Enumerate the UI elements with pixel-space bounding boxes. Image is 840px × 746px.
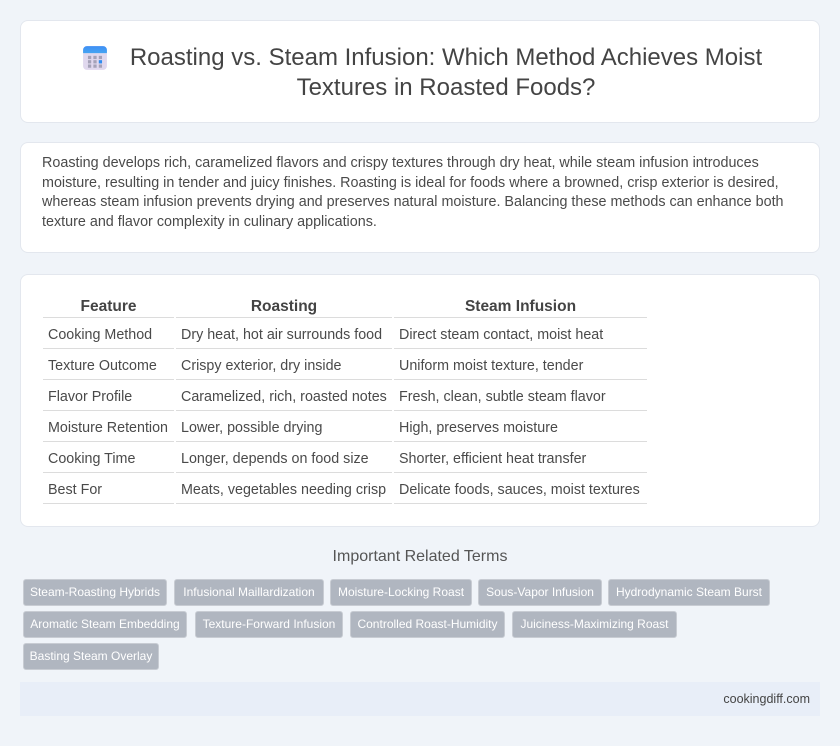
panel: comparison table — [20, 274, 820, 527]
comparison table: Fresh, clean, subtle steam flavor — [399, 389, 606, 405]
column header: Feature: Feature — [80, 298, 136, 315]
row: Texture Outcome: Texture Outcome — [48, 358, 157, 374]
tag — [174, 579, 324, 606]
comparison table: Lower, possible drying — [181, 420, 322, 436]
tag — [195, 611, 343, 638]
comparison table: Direct steam contact, moist heat — [399, 327, 603, 343]
intro text: whereas steam infusion prevents drying and preserves natural moisture. Balancing these methods can enhance both — [42, 194, 784, 210]
tag — [478, 579, 602, 606]
tag: Aromatic Steam Embedding — [30, 617, 180, 631]
comparison table: Longer, depends on food size — [181, 451, 369, 467]
tag — [608, 579, 770, 606]
title — [130, 44, 762, 101]
comparison table: Caramelized, rich, roasted notes — [181, 389, 387, 405]
tag — [350, 611, 505, 638]
tag: Sous-Vapor Infusion — [486, 585, 594, 599]
comparison table: High, preserves moisture — [399, 420, 558, 436]
tag: Controlled Roast-Humidity — [357, 617, 498, 631]
row: Best For: Best For — [48, 482, 102, 498]
row: Cooking Time: Cooking Time — [48, 451, 135, 467]
row: Moisture Retention: Moisture Retention — [48, 420, 168, 436]
tag: Moisture-Locking Roast — [338, 585, 464, 599]
panel: header — [20, 20, 820, 123]
tag — [23, 643, 159, 670]
intro text: moisture, resulting in tender and juicy finishes. Roasting is ideal for foods where a browned, crisp exterior is desired, — [42, 174, 779, 190]
title: Textures in Roasted Foods? — [297, 74, 595, 101]
tag: Texture-Forward Infusion — [203, 617, 335, 631]
comparison table: Crispy exterior, dry inside — [181, 358, 342, 374]
related term tags — [23, 579, 770, 670]
column header: Steam Infusion: Steam Infusion — [465, 298, 576, 315]
intro text — [42, 155, 784, 230]
intro text: Roasting develops rich, caramelized flavors and crispy textures through dry heat, while steam infusion introduces — [42, 155, 759, 171]
tag: Basting Steam Overlay — [30, 649, 152, 663]
row: Cooking Method: Cooking Method — [48, 327, 152, 343]
tag: Hydrodynamic Steam Burst — [616, 585, 762, 599]
icon: calendar — [83, 46, 107, 70]
footer text: source: cookingdiff.com — [723, 692, 810, 706]
comparison table: Delicate foods, sauces, moist textures — [399, 482, 640, 498]
footer bar — [20, 682, 820, 716]
row: Flavor Profile: Flavor Profile — [48, 389, 132, 405]
tag: Steam-Roasting Hybrids — [30, 585, 160, 599]
tag: Juiciness-Maximizing Roast — [520, 617, 669, 631]
tag — [23, 579, 167, 606]
comparison table: Shorter, efficient heat transfer — [399, 451, 586, 467]
tag — [512, 611, 677, 638]
tag — [23, 611, 187, 638]
comparison table: Uniform moist texture, tender — [399, 358, 583, 374]
tag — [330, 579, 472, 606]
intro text: texture and flavor complexity in culinary applications. — [42, 214, 377, 230]
title: Roasting vs. Steam Infusion: Which Method Achieves Moist — [130, 44, 762, 71]
column header: Roasting: Roasting — [251, 298, 317, 315]
comparison table: Dry heat, hot air surrounds food — [181, 327, 382, 343]
tag: Infusional Maillardization — [183, 585, 315, 599]
panel: introduction — [20, 142, 820, 253]
heading: related terms: Important Related Terms — [333, 548, 507, 565]
comparison table: Meats, vegetables needing crisp — [181, 482, 386, 498]
